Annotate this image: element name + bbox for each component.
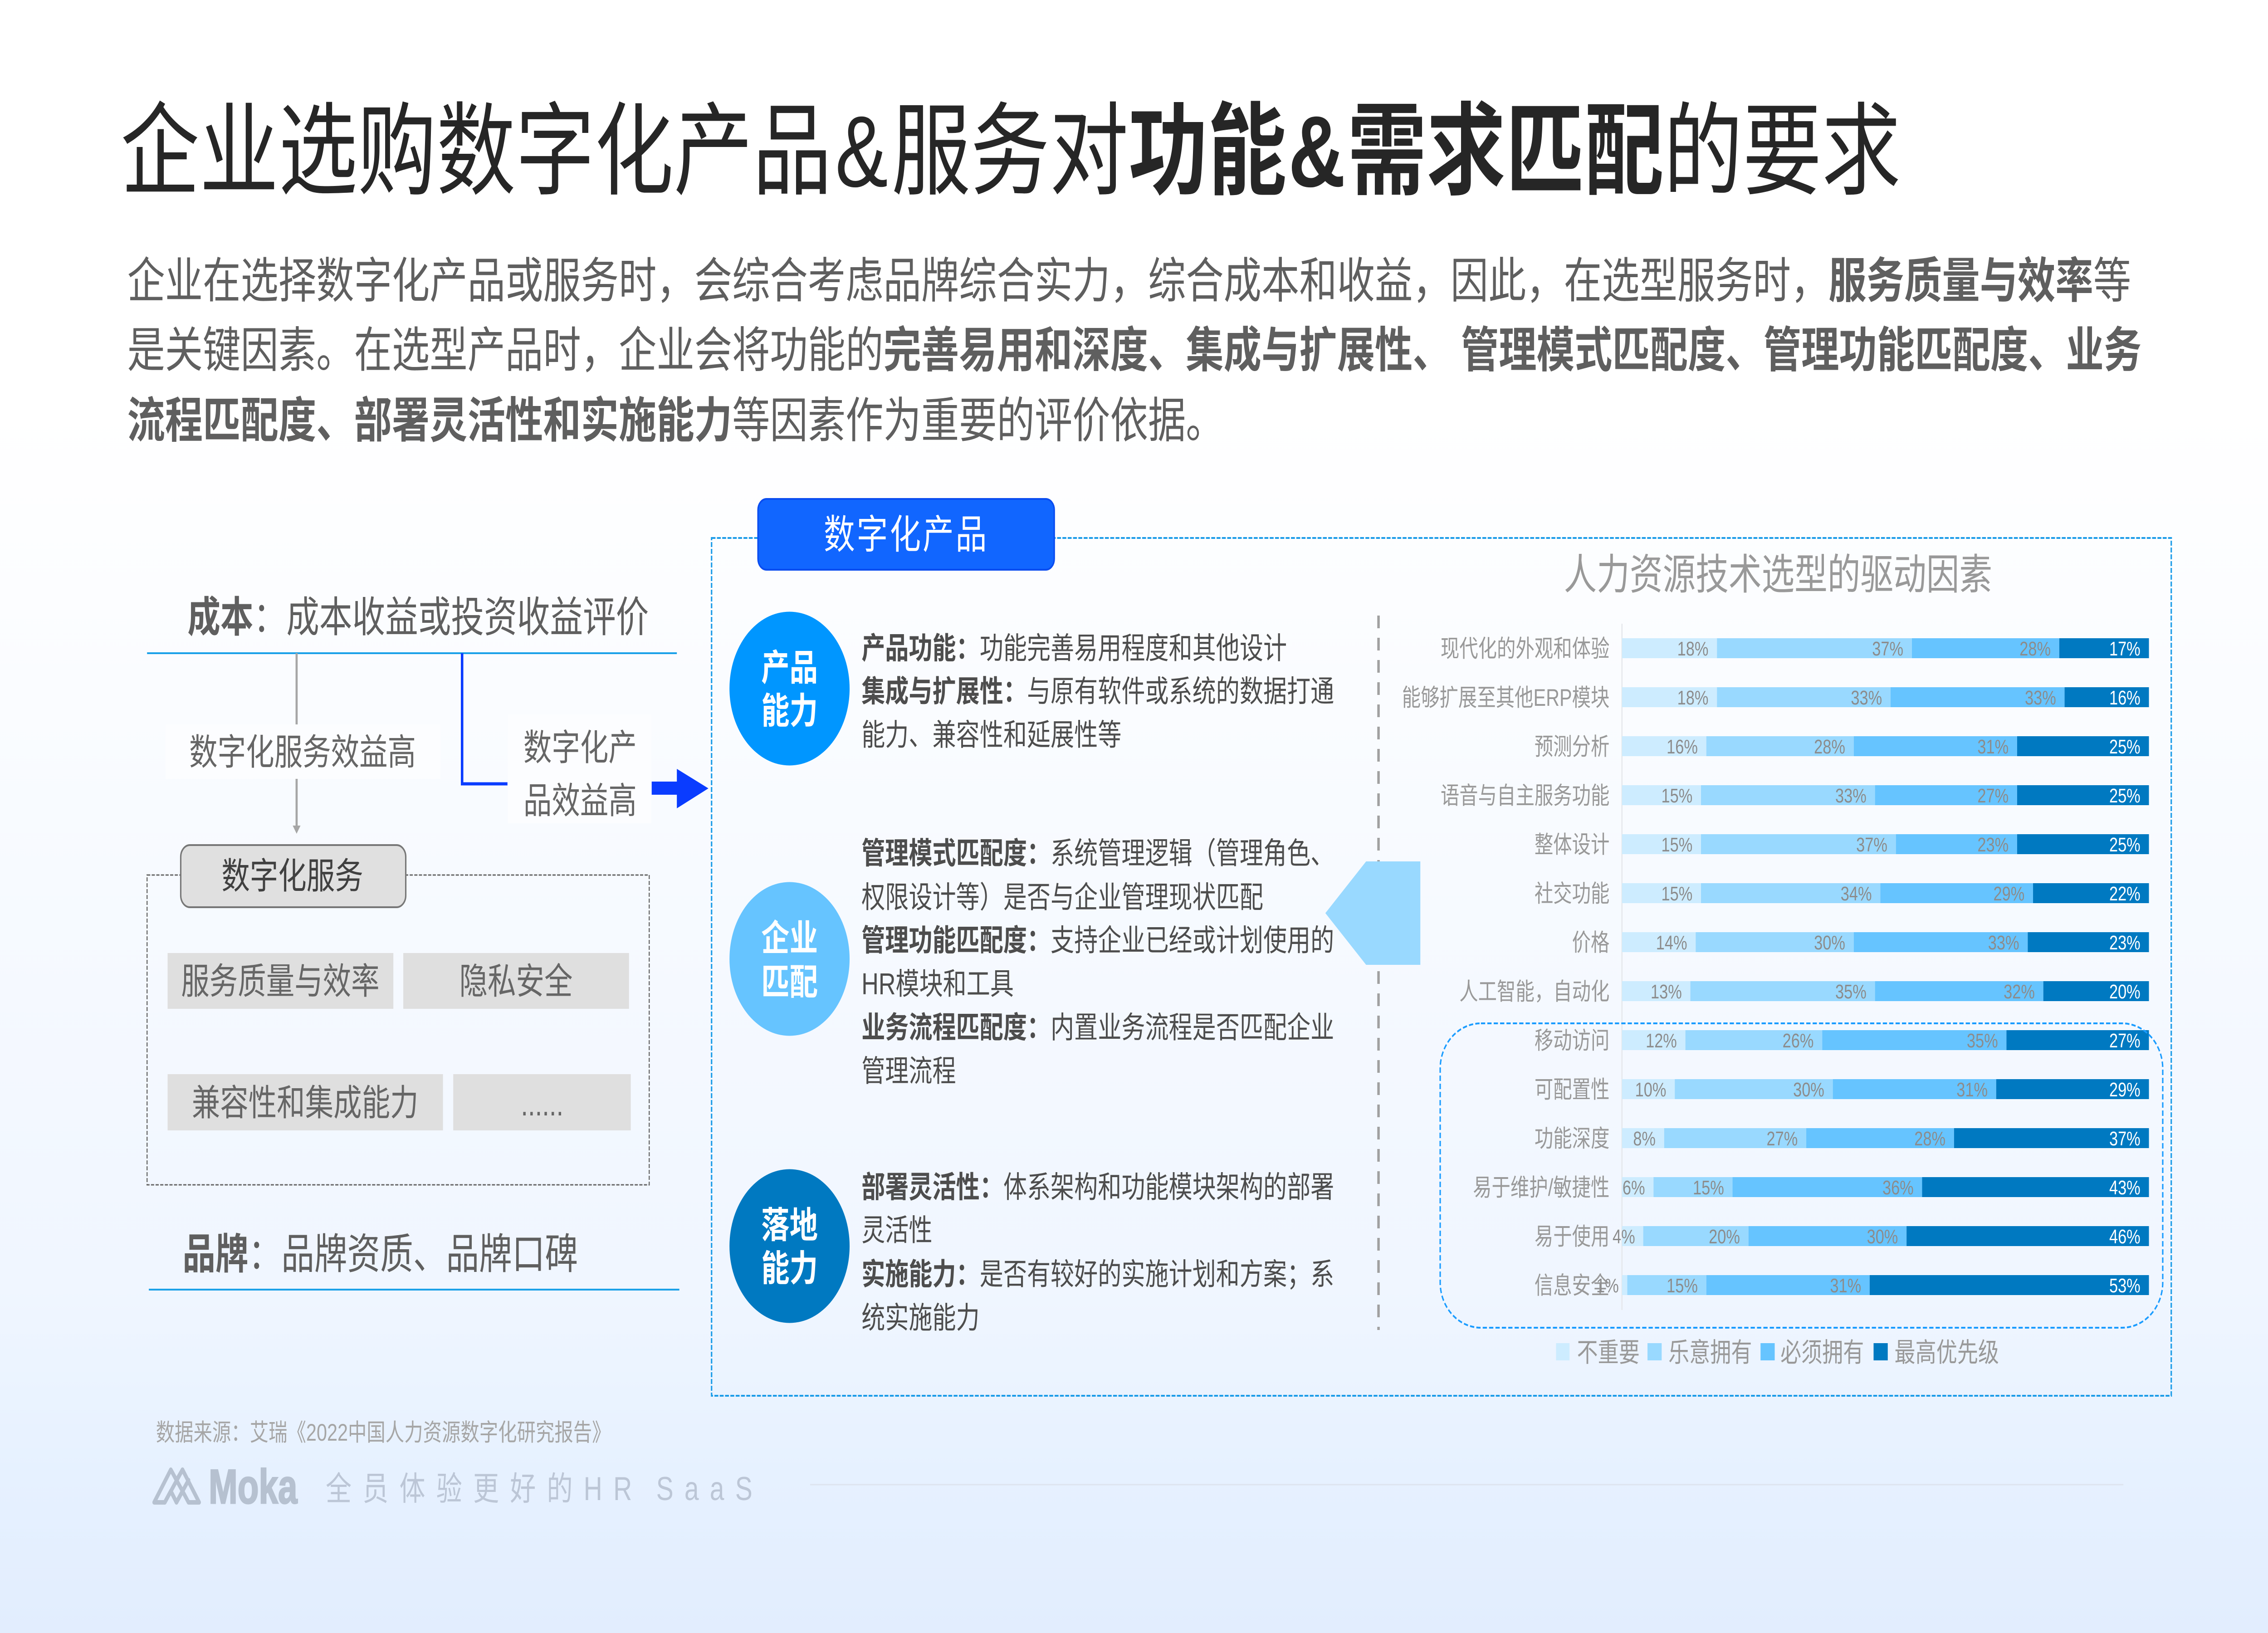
data source: 数据来源：艾瑞《2022中国人力资源数字化研究报告》 — [156, 1419, 611, 1446]
row: functional depth: 27% — [1766, 1128, 1798, 1150]
row: functional depth: 37% — [2109, 1128, 2141, 1150]
row: overall design: 37% — [1856, 834, 1887, 856]
label: product benefit: 数字化产 — [523, 728, 637, 768]
row: overall design: 25% — [2109, 834, 2141, 856]
digital service dashed box — [147, 875, 649, 1185]
text: implementation: 灵活性 — [861, 1213, 933, 1247]
arrow: grey to digital service — [293, 653, 300, 834]
brand heading: 品牌：品牌资质、品牌口碑 — [182, 1230, 578, 1278]
row: maintainability: 43% — [2109, 1177, 2141, 1199]
tag: service quality — [168, 953, 393, 1009]
row: ease of use: 30% — [1867, 1226, 1898, 1248]
row: overall design: 23% — [1977, 834, 2009, 856]
row: information security: 31% — [1830, 1275, 1861, 1297]
row: configurability — [1535, 1076, 2149, 1103]
row: maintainability: 6% — [1623, 1177, 1645, 1199]
row: ERP extension: 18% — [1677, 687, 1708, 709]
circle: implementation: 落地 — [761, 1206, 818, 1246]
tag: service quality: 服务质量与效率 — [181, 962, 380, 1002]
row: configurability: 29% — [2109, 1079, 2141, 1101]
row: functional depth: 功能深度 — [1535, 1125, 1609, 1152]
label: service benefit: 数字化服务效益高 — [189, 733, 416, 773]
connector: blue line to product label — [462, 653, 508, 784]
row: forecasting: 预测分析 — [1535, 733, 1609, 760]
row: modern look — [1441, 636, 2149, 662]
row: overall design: 15% — [1661, 834, 1692, 856]
row: price: 23% — [2109, 932, 2141, 954]
row: ease of use — [1535, 1223, 2149, 1250]
row: AI automation: 20% — [2109, 981, 2141, 1003]
row: information security — [1535, 1272, 2149, 1299]
cost heading: 成本：成本收益或投资收益评价 — [187, 593, 649, 641]
row: maintainability: 易于维护/敏捷性 — [1473, 1174, 1609, 1201]
legend — [1556, 1338, 1999, 1368]
row: modern look: 17% — [2109, 638, 2141, 660]
legend: 不重要 — [1577, 1338, 1640, 1368]
row: mobile access: 移动访问 — [1535, 1027, 1609, 1054]
digital service pill — [181, 845, 406, 907]
row: price — [1572, 929, 2149, 956]
legend: 必须拥有 — [1780, 1338, 1864, 1368]
row: forecasting: 25% — [2109, 736, 2141, 758]
row: modern look: 28% — [2019, 638, 2051, 660]
row: functional depth: 28% — [1914, 1128, 1945, 1150]
row: maintainability: 36% — [1882, 1177, 1914, 1199]
icon: Moka mountain mark — [154, 1470, 199, 1502]
row: price: 33% — [1988, 932, 2019, 954]
row: overall design: 整体设计 — [1535, 831, 1609, 858]
row: social: 社交功能 — [1535, 880, 1609, 907]
row: maintainability: 15% — [1693, 1177, 1724, 1199]
row: voice self-service: 15% — [1661, 785, 1692, 807]
row: modern look: 37% — [1872, 638, 1903, 660]
slogan: 全员体验更好的HR SaaS — [326, 1470, 763, 1507]
text: business fit: 业务流程匹配度：内置业务流程是否匹配企业 — [861, 1011, 1334, 1044]
tag: compatibility — [168, 1074, 443, 1130]
row: configurability: 31% — [1956, 1079, 1988, 1101]
arrow: light blue pointer from chart to text — [1325, 861, 1420, 965]
circle: business fit — [729, 882, 850, 1036]
row: overall design — [1535, 831, 2149, 858]
circle: product capability: 能力 — [761, 691, 818, 732]
row: ERP extension: 能够扩展至其他ERP模块 — [1402, 684, 1609, 711]
row: mobile access: 35% — [1967, 1030, 1998, 1052]
row: AI automation: 13% — [1651, 981, 1682, 1003]
row: mobile access: 26% — [1783, 1030, 1813, 1052]
row: forecasting: 28% — [1814, 736, 1845, 758]
row: information security: 53% — [2109, 1275, 2141, 1297]
row: AI automation: 32% — [2004, 981, 2035, 1003]
row: ERP extension: 33% — [1851, 687, 1882, 709]
row: forecasting: 31% — [1977, 736, 2009, 758]
text: product capability: 产品功能：功能完善易用程度和其他设计 — [861, 631, 1287, 665]
row: AI automation: 人工智能，自动化 — [1459, 978, 1609, 1005]
circle: business fit: 匹配 — [761, 963, 818, 1003]
tag: compatibility: 兼容性和集成能力 — [192, 1083, 419, 1124]
panel header: 数字化产品 — [824, 513, 988, 557]
label: service benefit — [166, 724, 440, 779]
panel dashed border — [712, 538, 2171, 1396]
row: configurability: 可配置性 — [1535, 1076, 1609, 1103]
row: modern look: 18% — [1677, 638, 1708, 660]
text: business fit — [861, 836, 1334, 1088]
row: voice self-service: 27% — [1977, 785, 2009, 807]
row: mobile access: 27% — [2109, 1030, 2141, 1052]
circle: implementation — [729, 1169, 850, 1323]
row: configurability: 10% — [1635, 1079, 1666, 1101]
logo wordmark: Moka — [209, 1460, 298, 1514]
text: implementation: 实施能力：是否有较好的实施计划和方案；系 — [861, 1257, 1334, 1291]
text: business fit: 管理模式匹配度：系统管理逻辑（管理角色、 — [861, 836, 1334, 870]
legend: 最高优先级 — [1895, 1338, 1999, 1368]
text: implementation — [861, 1170, 1334, 1335]
tag: privacy: 隐私安全 — [459, 962, 572, 1002]
row: ERP extension — [1402, 684, 2149, 711]
row: information security: 1% — [1596, 1275, 1619, 1297]
tag: ellipsis — [453, 1074, 631, 1130]
footer: Moka logo and slogan — [154, 1460, 2123, 1514]
row: ERP extension: 16% — [2109, 687, 2141, 709]
row: voice self-service: 语音与自主服务功能 — [1441, 782, 1609, 809]
panel: cost, service and brand — [147, 593, 709, 1290]
row: maintainability — [1473, 1174, 2149, 1201]
row: ERP extension: 33% — [2025, 687, 2056, 709]
row: ease of use: 易于使用 — [1535, 1223, 1609, 1250]
intro paragraph: 企业在选择数字化产品或服务时，会综合考虑品牌综合实力，综合成本和收益，因此，在选型服务时，服务质量与效率等 — [127, 254, 2131, 308]
text: product capability: 集成与扩展性：与原有软件或系统的数据打通 — [861, 675, 1334, 708]
label: product benefit: 品效益高 — [523, 781, 637, 821]
chart title: 人力资源技术选型的驱动因素 — [1564, 551, 1992, 598]
row: social — [1535, 880, 2149, 907]
panel header — [758, 499, 1054, 570]
row: social: 29% — [1993, 883, 2024, 905]
text: product capability — [861, 631, 1334, 752]
row: configurability: 30% — [1793, 1079, 1824, 1101]
row: social: 34% — [1841, 883, 1872, 905]
row: functional depth: 8% — [1633, 1128, 1656, 1150]
row: mobile access — [1535, 1027, 2149, 1054]
row: information security: 15% — [1667, 1275, 1698, 1297]
title: 企业选购数字化产品&服务对功能&需求匹配的要求 — [121, 95, 1901, 208]
row: AI automation: 35% — [1835, 981, 1867, 1003]
circle: business fit: 企业 — [761, 919, 818, 959]
highlight: dashed rounded frame — [1440, 1023, 2163, 1328]
text: business fit: 管理功能匹配度：支持企业已经或计划使用的 — [861, 924, 1334, 957]
row: ease of use: 4% — [1613, 1226, 1635, 1248]
row: social: 22% — [2109, 883, 2141, 905]
legend: 乐意拥有 — [1668, 1338, 1752, 1368]
arrow: blue to product panel — [652, 769, 709, 808]
circle: product capability: 产品 — [761, 648, 818, 689]
text: business fit: 管理流程 — [861, 1054, 956, 1088]
row: price: 14% — [1656, 932, 1687, 954]
text: implementation: 统实施能力 — [861, 1301, 980, 1335]
panel: digital product — [712, 499, 2171, 1396]
row: voice self-service: 25% — [2109, 785, 2141, 807]
circle: implementation: 能力 — [761, 1249, 818, 1289]
tag: privacy — [403, 953, 629, 1009]
intro paragraph — [127, 254, 2141, 448]
row: ease of use: 20% — [1709, 1226, 1740, 1248]
row: information security: 信息安全 — [1535, 1272, 1609, 1299]
text: product capability: 能力、兼容性和延展性等 — [861, 718, 1121, 752]
row: modern look: 现代化的外观和体验 — [1441, 636, 1609, 662]
row: ease of use: 46% — [2109, 1226, 2141, 1248]
intro paragraph: 流程匹配度、部署灵活性和实施能力等因素作为重要的评价依据。 — [127, 394, 1224, 448]
row: functional depth — [1535, 1125, 2149, 1152]
label: product benefit — [508, 714, 651, 823]
text: business fit: HR模块和工具 — [861, 967, 1014, 1001]
text: implementation: 部署灵活性：体系架构和功能模块架构的部署 — [861, 1170, 1334, 1204]
stacked bar chart — [1402, 624, 2149, 1310]
row: price: 价格 — [1572, 929, 1609, 956]
row: mobile access: 12% — [1646, 1030, 1677, 1052]
row: forecasting: 16% — [1667, 736, 1698, 758]
tag: ellipsis: ...... — [521, 1086, 563, 1123]
row: price: 30% — [1814, 932, 1845, 954]
row: AI automation — [1459, 978, 2149, 1005]
text: business fit: 权限设计等）是否与企业管理现状匹配 — [861, 880, 1263, 914]
row: voice self-service — [1441, 782, 2149, 809]
digital service pill: 数字化服务 — [221, 856, 363, 897]
circle: product capability — [729, 611, 850, 766]
row: voice self-service: 33% — [1835, 785, 1867, 807]
intro paragraph: 是关键因素。在选型产品时，企业会将功能的完善易用和深度、集成与扩展性、 管理模式匹配度、管理功能匹配度、业务 — [127, 323, 2141, 377]
row: social: 15% — [1661, 883, 1692, 905]
row: forecasting — [1535, 733, 2149, 760]
